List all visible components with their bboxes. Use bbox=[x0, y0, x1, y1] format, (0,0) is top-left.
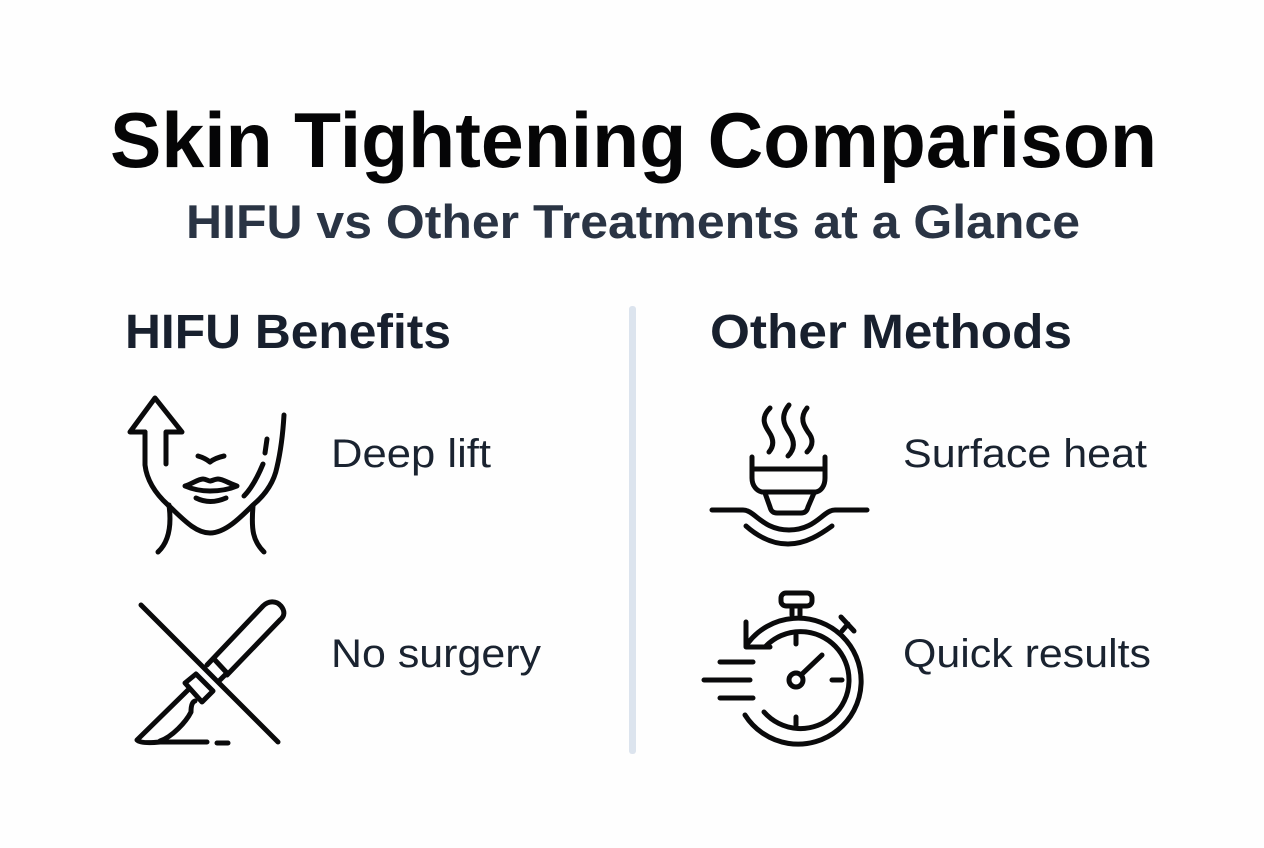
subtitle: HIFU vs Other Treatments at a Glance bbox=[186, 195, 1080, 248]
label: Deep lift: Deep lift bbox=[331, 432, 491, 476]
icon: face with lift arrow bbox=[130, 398, 284, 552]
panel: HIFU benefits bbox=[125, 306, 541, 743]
heading: HIFU Benefits: HIFU Benefits bbox=[125, 306, 451, 359]
icon: surface heat device bbox=[712, 405, 867, 544]
label: No surgery: No surgery bbox=[331, 632, 541, 676]
label: Quick results: Quick results bbox=[903, 632, 1151, 676]
panel: other methods bbox=[704, 306, 1151, 744]
icon: crossed-out scalpel bbox=[137, 602, 284, 743]
heading: Other Methods: Other Methods bbox=[710, 306, 1072, 359]
label: Surface heat: Surface heat bbox=[903, 432, 1147, 476]
icon: stopwatch bbox=[704, 593, 861, 744]
divider bbox=[629, 306, 636, 754]
title: Skin Tightening Comparison bbox=[110, 96, 1157, 184]
